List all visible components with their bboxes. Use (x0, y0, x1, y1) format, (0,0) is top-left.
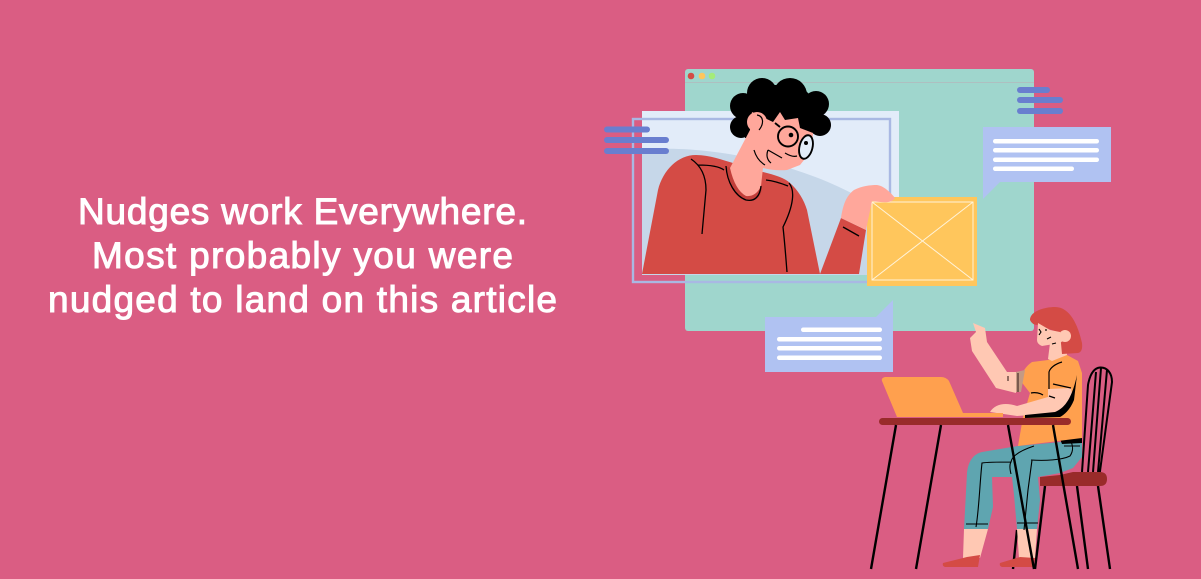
man clothing lines (691, 159, 859, 272)
man hair (730, 78, 831, 138)
woman waist (1060, 437, 1082, 444)
speech bubble: bottom (765, 300, 893, 372)
woman hair (1030, 307, 1082, 354)
table top (879, 418, 1071, 425)
table legs (871, 425, 1078, 569)
woman shoes (943, 555, 1035, 567)
woman face lines (1039, 329, 1056, 344)
woman raised arm (970, 323, 1016, 393)
man face lines (754, 150, 797, 165)
woman shirt lines (1031, 362, 1071, 398)
chair legs (1013, 486, 1110, 569)
woman face (1037, 323, 1064, 346)
man sleeve (820, 218, 866, 274)
woman lower arm (990, 388, 1073, 416)
woman pants (964, 440, 1082, 529)
icon: envelope (867, 197, 977, 286)
laptop (882, 377, 1003, 417)
woman shirt (1018, 355, 1082, 446)
chair back (1082, 367, 1112, 486)
icon: left text lines (604, 126, 669, 154)
woman arm shadow (1025, 375, 1077, 418)
title: nudges text: nudged to land on this article (48, 279, 557, 320)
chair seat (1040, 472, 1107, 486)
man ear (747, 112, 767, 132)
icon: top right text lines (1017, 87, 1063, 114)
man hand (841, 185, 895, 230)
woman pants lines (966, 440, 1080, 530)
woman lower legs (963, 529, 1037, 558)
speech bubble: top right (983, 127, 1111, 199)
man collar (726, 167, 762, 201)
figure: woman at desk (871, 307, 1112, 569)
woman sleeve band (1016, 370, 1025, 392)
title: nudges text (48, 191, 557, 320)
figure: man with glasses (642, 78, 866, 274)
man glasses (775, 123, 815, 160)
man neck and head (730, 112, 813, 196)
title: nudges text: Nudges work Everywhere. (78, 191, 527, 232)
man body (642, 155, 820, 274)
woman neck (1048, 340, 1067, 361)
panel: browser window (685, 69, 1034, 331)
panel: video call photo (633, 111, 899, 282)
title: nudges text: Most probably you were (92, 235, 513, 276)
